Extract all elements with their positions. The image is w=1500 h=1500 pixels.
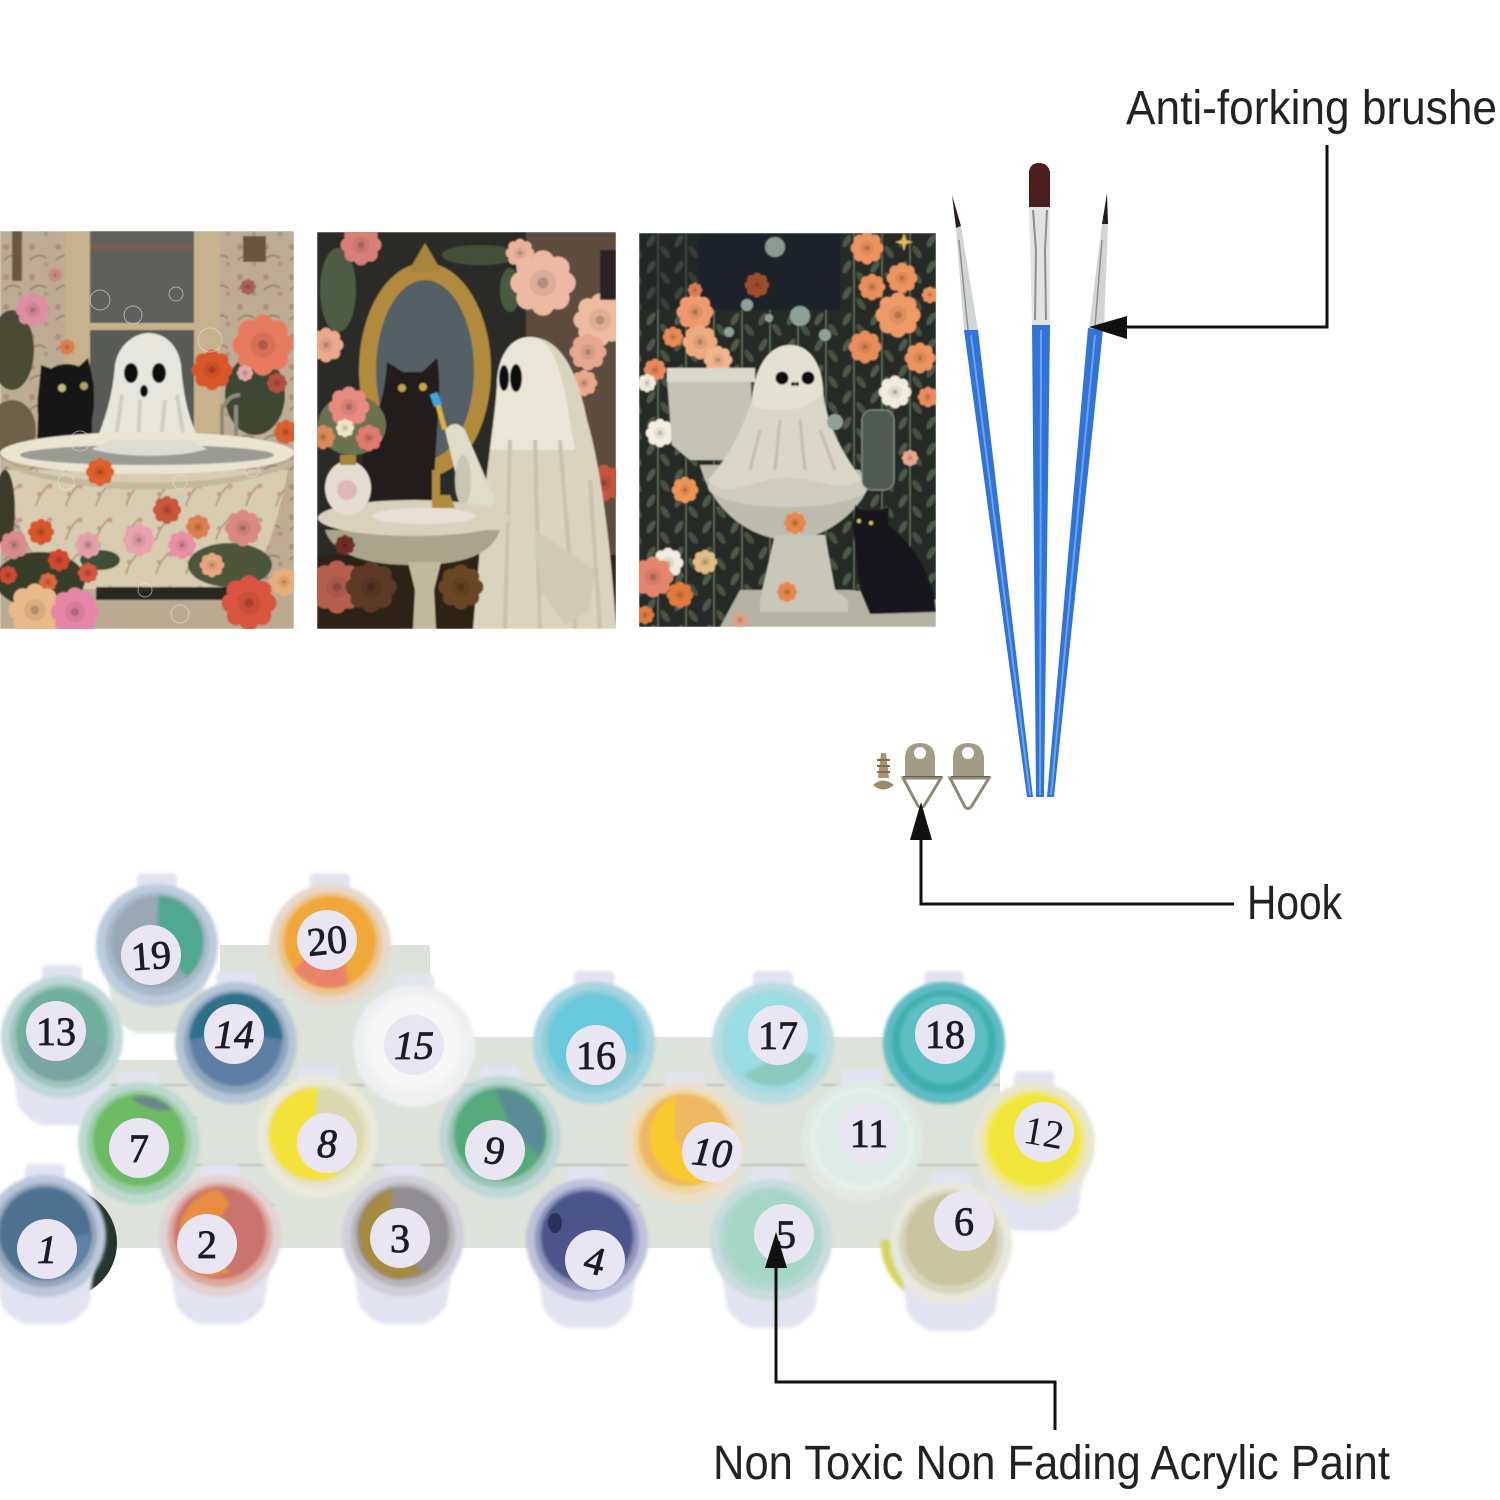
icon: hook one	[903, 743, 942, 808]
pot 7: 7	[129, 1126, 149, 1171]
pot 7	[78, 1071, 200, 1231]
pot 13: 13	[36, 1009, 76, 1054]
pot 4	[526, 1168, 648, 1328]
brush: center flat brush	[1029, 163, 1050, 797]
paint pot tray	[105, 945, 1000, 1248]
pot 6	[881, 1171, 1012, 1331]
arrow: to brushes	[1089, 145, 1327, 339]
pot 19: 19	[130, 932, 173, 979]
pot 16	[533, 971, 655, 1131]
pot 15: 15	[394, 1023, 434, 1068]
pot 9	[439, 1065, 561, 1225]
pot 6: 6	[954, 1199, 974, 1244]
pot 11: 11	[850, 1111, 888, 1156]
pot 17: 17	[758, 1013, 798, 1058]
pot 1: 1	[37, 1227, 57, 1272]
brushes	[952, 163, 1108, 797]
arrow: to hook	[910, 802, 1234, 904]
pot 18: 18	[925, 1012, 965, 1057]
label: hook: Hook	[1247, 877, 1343, 930]
icon: screw	[873, 753, 894, 790]
pot 13	[1, 965, 123, 1125]
pot 15	[353, 974, 475, 1134]
pot 20: 20	[305, 916, 349, 965]
pot 3	[342, 1164, 464, 1324]
pot 3: 3	[390, 1216, 410, 1261]
brush: left round brush	[952, 195, 1033, 797]
arrow: to paint	[765, 1232, 1055, 1430]
pot 4: 4	[579, 1236, 610, 1285]
pot 12	[973, 1071, 1095, 1231]
pot 8: 8	[317, 1121, 337, 1166]
paint pots	[0, 873, 1095, 1331]
pot 12: 12	[1020, 1107, 1068, 1158]
pot 9: 9	[480, 1126, 509, 1175]
pot 14: 14	[214, 1012, 254, 1057]
painting: ghost brushing teeth at sink	[309, 225, 627, 629]
label: paint: Non Toxic Non Fading Acrylic Paint	[713, 1437, 1390, 1490]
pot 5: 5	[776, 1212, 796, 1257]
pot 5	[710, 1168, 832, 1328]
pot 11	[801, 1069, 923, 1229]
pot 8	[257, 1065, 379, 1225]
pot 10: 10	[690, 1128, 734, 1177]
pot 19	[96, 873, 218, 1033]
pot 2	[159, 1164, 281, 1324]
pot 10	[624, 1071, 746, 1231]
painting: ghost and cat in bathtub	[0, 231, 298, 637]
pot 18	[883, 971, 1005, 1131]
painting: ghost on toilet in garden	[633, 232, 938, 628]
pot 2: 2	[197, 1222, 217, 1267]
pot 1	[0, 1164, 117, 1324]
brush: right round brush	[1047, 193, 1108, 797]
pot 14	[175, 971, 297, 1131]
icon: hook two	[950, 743, 990, 808]
pot 17	[712, 971, 834, 1131]
icon: wall hooks and screw	[873, 743, 990, 808]
pot 20	[269, 873, 391, 1033]
pot 16: 16	[576, 1033, 616, 1078]
